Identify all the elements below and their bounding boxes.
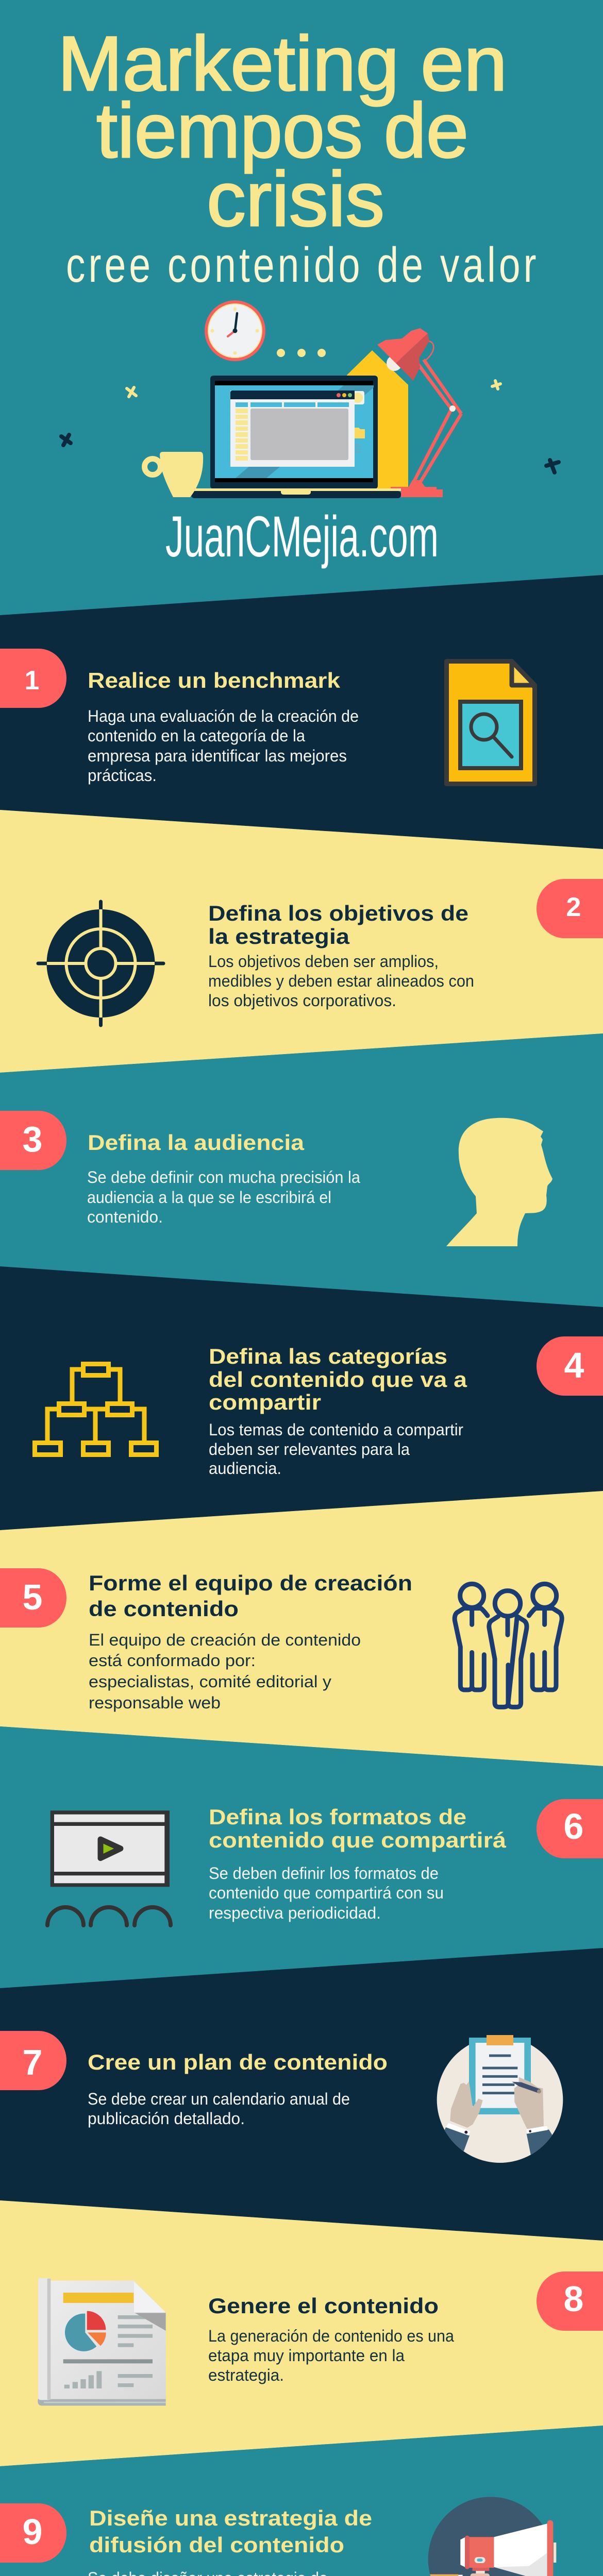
icon: megaphone with hand [426, 2497, 556, 2576]
icon: coffee cup [144, 452, 203, 497]
body text: etapa muy importante en la [208, 2346, 405, 2365]
body text: contenido. [87, 1208, 163, 1226]
heading: Defina la audiencia [88, 1130, 305, 1155]
heading: Genere el contenido [208, 2294, 439, 2318]
body text: Los objetivos deben ser amplios, [208, 952, 439, 971]
panel: step 5 equipo [0, 1491, 603, 1766]
number badge 6 [537, 1799, 603, 1858]
number badge 8: 8 [564, 2279, 583, 2319]
title [58, 20, 507, 242]
title: tiempos de [96, 87, 468, 174]
heading: Realice un benchmark [88, 668, 341, 692]
panel: step 3 audiencia [0, 1033, 603, 1307]
icon: org chart [35, 1364, 157, 1455]
heading: contenido que compartirá [209, 1828, 507, 1852]
heading [89, 1571, 412, 1621]
body text: audiencia. [209, 1459, 281, 1478]
body text: responsable web [89, 1693, 221, 1712]
body text [88, 2090, 350, 2128]
number badge 8 [537, 2272, 603, 2331]
icon: report document with charts [38, 2278, 166, 2405]
body text [209, 1864, 444, 1922]
icon: yellow house shape [347, 350, 408, 489]
icon: decorative crosses [61, 381, 559, 472]
heading: Cree un plan de contenido [88, 2050, 388, 2074]
body text: publicación detallado. [88, 2109, 245, 2128]
panel: step 6 formatos [0, 1726, 603, 1988]
heading: difusión del contenido [89, 2533, 344, 2557]
title: crisis [207, 156, 384, 242]
heading: del contenido que va a [209, 1367, 467, 1392]
number badge 6: 6 [564, 1806, 583, 1846]
heading: Diseñe una estrategia de [89, 2506, 372, 2530]
number badge 3: 3 [23, 1119, 42, 1159]
icon: video player [47, 1810, 171, 1925]
body text: respectiva periodicidad. [209, 1904, 381, 1922]
heading: la estrategia [208, 924, 350, 948]
number badge 4 [537, 1336, 603, 1396]
number badge 7 [0, 2031, 66, 2090]
body text [87, 1168, 360, 1226]
body text: La generación de contenido es una [208, 2327, 454, 2345]
heading [208, 901, 468, 948]
number badge 2 [537, 879, 603, 938]
number badge 9: 9 [23, 2512, 42, 2552]
number badge 7: 7 [23, 2042, 42, 2082]
icon: three dots [277, 349, 326, 357]
number badge 9 [0, 2503, 66, 2563]
body text [88, 707, 359, 785]
body text: audiencia a la que se le escribirá el [87, 1188, 331, 1207]
body text: los objetivos corporativos. [208, 991, 396, 1010]
heading [209, 1344, 467, 1414]
heading: Defina los objetivos de [208, 901, 468, 925]
panel: step 9 difusion [0, 2426, 603, 2576]
number badge 1: 1 [25, 666, 39, 696]
body text [209, 1420, 463, 1478]
body text: especialistas, comité editorial y [89, 1672, 331, 1691]
heading: de contenido [89, 1597, 239, 1621]
heading [209, 1805, 507, 1852]
body text: Se debe definir con mucha precisión la [87, 1168, 360, 1187]
icon: hands writing on clipboard [437, 2035, 563, 2163]
title: Marketing en [58, 20, 507, 107]
body text: El equipo de creación de contenido [89, 1631, 361, 1649]
body text: Se deben definir los formatos de [209, 1864, 439, 1883]
icon: head silhouette [446, 1118, 552, 1246]
panel: step 7 plan [0, 1948, 603, 2241]
icon: document with magnifier [446, 662, 535, 784]
panel: step 1 benchmark [0, 575, 603, 849]
body text: prácticas. [88, 766, 157, 785]
body text: está conformado por: [89, 1651, 256, 1670]
heading: Forme el equipo de creación [89, 1571, 412, 1595]
panel: step 4 categorias [0, 1266, 603, 1530]
website link: JuanCMejia.com [165, 504, 439, 569]
panel: header [0, 0, 603, 615]
body text: Haga una evaluación de la creación de [88, 707, 359, 725]
body text: medibles y deben estar alineados con [208, 972, 474, 990]
number badge 5: 5 [23, 1577, 42, 1617]
panel: step 2 objetivos [0, 810, 603, 1073]
body text [208, 2327, 454, 2384]
number badge 1 [0, 649, 66, 708]
body text [89, 1631, 361, 1712]
body text: Los temas de contenido a compartir [209, 1420, 463, 1439]
number badge 2: 2 [566, 892, 581, 922]
heading: compartir [209, 1390, 321, 1414]
number badge 3 [0, 1111, 66, 1170]
icon: team of three people [455, 1584, 562, 1707]
heading: Defina las categorías [209, 1344, 447, 1368]
panel: step 8 generar [0, 2200, 603, 2466]
body text: deben ser relevantes para la [209, 1440, 410, 1459]
number badge 5 [0, 1568, 66, 1628]
number badge 4: 4 [564, 1345, 584, 1385]
icon: target [38, 902, 163, 1025]
body text: estrategia. [208, 2366, 284, 2384]
icon: desk lamp [377, 328, 461, 497]
body text: Se debe crear un calendario anual de [88, 2090, 350, 2108]
body text [208, 952, 474, 1010]
icon: clock [205, 300, 265, 361]
heading: Defina los formatos de [209, 1805, 466, 1829]
body text: contenido que compartirá con su [209, 1884, 444, 1902]
body text: empresa para identificar las mejores [88, 747, 347, 765]
subtitle: cree contenido de valor [66, 238, 537, 293]
heading [89, 2506, 372, 2557]
icon: laptop [191, 376, 401, 498]
body text: contenido en la categoría de la [88, 726, 305, 745]
